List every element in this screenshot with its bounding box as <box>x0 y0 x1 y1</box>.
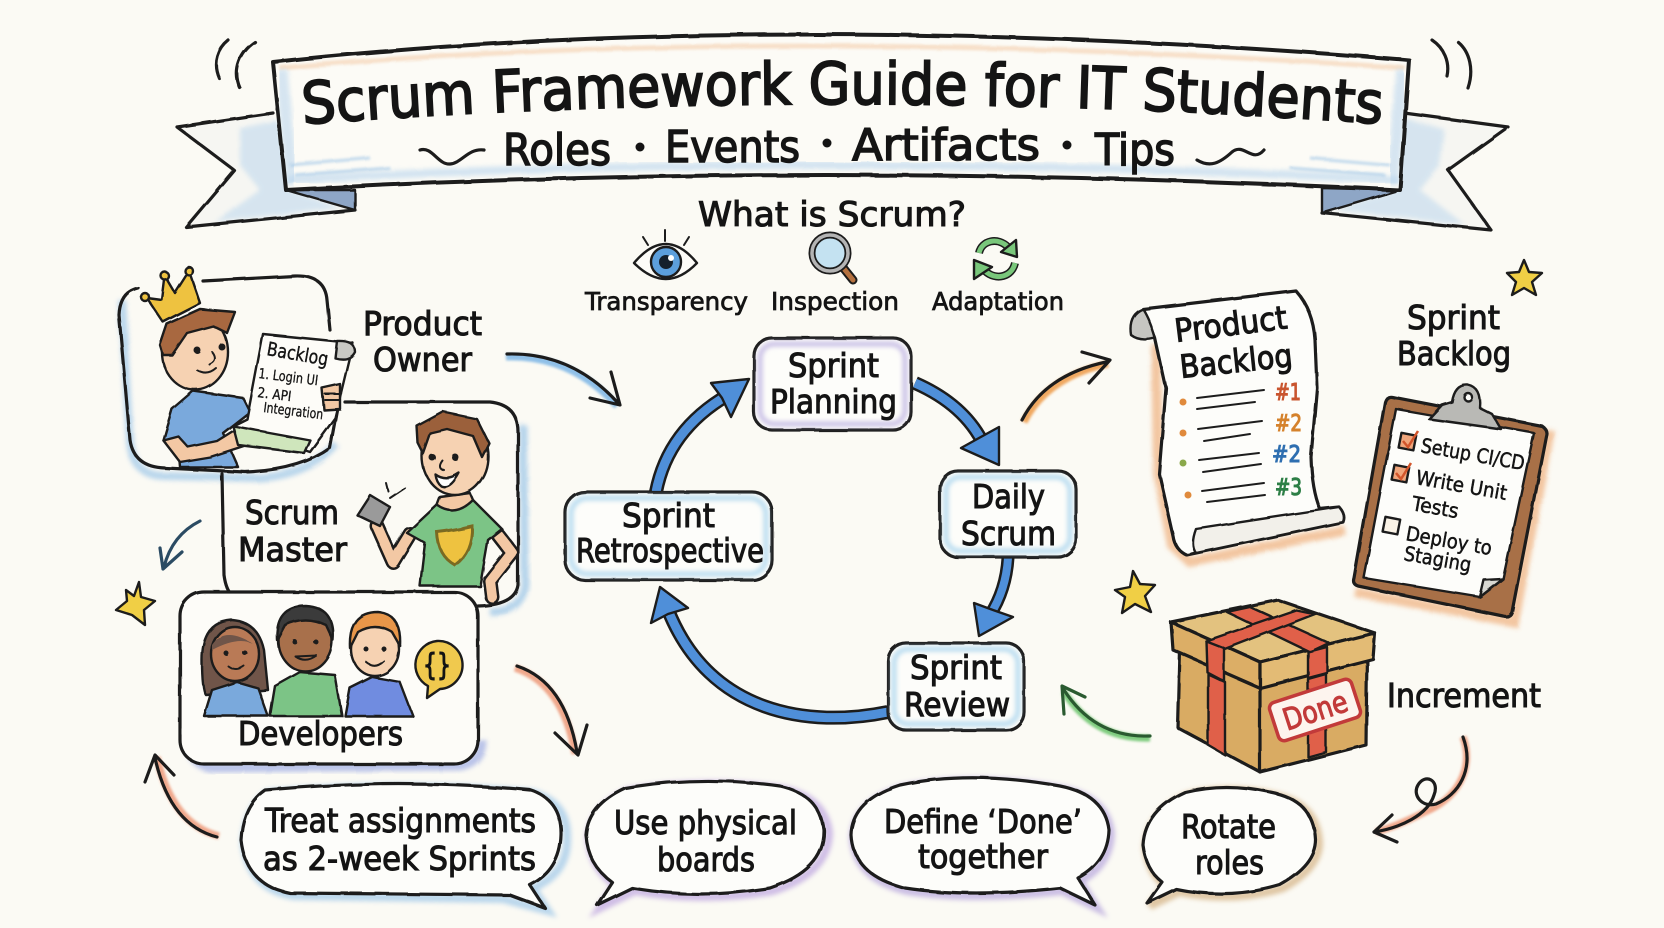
subtitle text: Artifacts <box>852 120 1040 171</box>
tip bubble: treat assignments <box>241 784 567 911</box>
title banner <box>175 32 1510 270</box>
event: daily scrum <box>940 471 1076 557</box>
label: Increment <box>1387 676 1541 715</box>
heading <box>1397 298 1511 373</box>
event: sprint review: Review <box>904 685 1010 724</box>
arm left <box>377 526 410 562</box>
icon: star middle <box>1115 571 1155 613</box>
figure: scrum master <box>357 412 512 597</box>
heading: Backlog <box>1178 336 1294 386</box>
icon: code bubble <box>415 641 463 698</box>
tip bubble: rotate roles <box>1143 787 1319 906</box>
box <box>1171 600 1375 772</box>
arrow: planning to daily <box>915 383 999 465</box>
backlog scroll: 2. API <box>257 385 292 405</box>
arrow: review to retrospective <box>651 587 888 718</box>
shirt <box>407 500 502 586</box>
label <box>238 493 347 569</box>
arm right <box>490 535 512 597</box>
event: sprint review: Sprint <box>910 648 1002 687</box>
figure: developer two <box>270 606 342 716</box>
checklist: Write Unit <box>1414 465 1509 505</box>
checklist: Staging <box>1402 541 1473 577</box>
artifact: product backlog <box>1130 291 1345 562</box>
subtitle text: Events <box>665 122 800 173</box>
arrow: retrospective to planning <box>656 379 749 492</box>
label: Scrum <box>245 493 339 532</box>
arrow: daily to review <box>974 558 1013 636</box>
figure: product owner <box>141 267 253 467</box>
panel: developers <box>180 592 482 768</box>
checklist <box>1383 431 1527 577</box>
label: Inspection <box>771 287 899 316</box>
heading <box>1172 298 1294 386</box>
tip bubble: define done: Define ‘Done’ <box>884 802 1082 841</box>
pillar: inspection <box>771 235 899 316</box>
arrow: developers to tips <box>515 666 587 755</box>
hair <box>417 412 489 457</box>
frame <box>222 402 525 612</box>
arrow: cycle to product backlog <box>1022 352 1110 422</box>
arrow: scrum master to developers <box>160 521 200 569</box>
head <box>422 417 488 495</box>
subtitle swashes <box>420 149 1264 164</box>
face <box>194 346 200 354</box>
shirt <box>163 391 250 467</box>
priority labels <box>1272 380 1302 501</box>
icon: shield <box>437 526 472 565</box>
scroll <box>1130 291 1345 562</box>
banner right tail <box>1322 113 1508 230</box>
pillar: adaptation <box>932 240 1064 316</box>
artifact: increment <box>1171 600 1541 772</box>
gadget <box>357 495 390 526</box>
sprint cycle <box>565 338 1076 730</box>
label: Developers <box>238 714 403 753</box>
event: sprint retrospective <box>565 492 772 580</box>
frame <box>119 276 337 478</box>
checklist: Tests <box>1409 491 1461 523</box>
tip bubble: rotate roles: Rotate <box>1181 807 1276 846</box>
tip bubble: rotate roles: roles <box>1195 843 1264 882</box>
frame <box>180 592 482 768</box>
icon: star left <box>116 582 155 625</box>
icon: crown <box>147 271 200 322</box>
event: sprint planning <box>754 338 911 430</box>
tip bubble: define done: together <box>918 837 1048 876</box>
backlog scroll: 1. Login UI <box>258 366 319 389</box>
priority labels: #1 <box>1275 380 1301 406</box>
tip bubble: physical boards <box>586 781 829 908</box>
icon: eye <box>634 230 697 279</box>
tip bubble: physical boards: Use physical <box>614 803 797 842</box>
event: daily scrum: Daily <box>972 477 1045 516</box>
backlog scroll: Backlog <box>265 338 330 371</box>
priority labels: #2 <box>1272 442 1301 468</box>
motion ticks <box>216 40 1471 88</box>
event: sprint planning: Sprint <box>788 346 879 385</box>
priority labels: #3 <box>1275 475 1302 501</box>
figure: developer three <box>345 612 413 716</box>
checklist: Deploy to <box>1404 521 1494 560</box>
tip bubble: define done <box>851 778 1111 908</box>
banner main ribbon <box>273 34 1409 190</box>
icon: cycle arrows <box>974 240 1017 279</box>
heading: Product <box>1172 298 1289 350</box>
arrow: product owner to cycle <box>506 354 620 406</box>
artifact: sprint backlog <box>1354 298 1550 622</box>
label: Product <box>363 304 482 343</box>
tip bubble: treat assignments: Treat assignments <box>264 801 536 840</box>
arrow: increment loop to tips <box>1374 737 1467 842</box>
icon: magnifier <box>812 235 853 280</box>
arrow: tips to developers <box>145 755 219 837</box>
title text: Scrum Framework Guide for IT Students <box>303 59 1381 125</box>
pillar: transparency <box>584 230 748 316</box>
priority labels: #2 <box>1275 411 1302 437</box>
arrow: increment to review <box>1062 686 1150 738</box>
head <box>162 314 228 390</box>
done label: Done <box>1279 685 1352 738</box>
backlog scroll: Integration <box>263 400 324 423</box>
subtitle text <box>503 120 1175 176</box>
clipboard <box>1354 385 1550 622</box>
heading: Sprint <box>1407 298 1500 337</box>
event: sprint retrospective: Sprint <box>622 496 715 535</box>
arm <box>163 431 253 462</box>
label: Adaptation <box>932 287 1064 316</box>
banner left tail <box>177 113 355 227</box>
subtitle text: Roles <box>503 125 611 176</box>
event: sprint planning: Planning <box>770 382 897 421</box>
list lines <box>1197 390 1265 502</box>
event: daily scrum: Scrum <box>961 514 1056 553</box>
icon: code bubble: {} <box>423 648 451 683</box>
label: Transparency <box>584 287 748 316</box>
heading: what is scrum: What is Scrum? <box>698 195 966 235</box>
hair <box>160 309 235 355</box>
icon: star top right <box>1507 260 1542 295</box>
event: sprint retrospective: Retrospective <box>576 531 764 570</box>
subtitle text: Tips <box>1094 125 1175 176</box>
heading: Backlog <box>1397 334 1511 373</box>
figure: developer one <box>202 620 268 716</box>
panel: product owner <box>119 267 482 478</box>
backlog scroll <box>233 334 355 453</box>
face <box>428 454 436 460</box>
list bullets <box>1180 398 1192 498</box>
event: sprint review <box>888 643 1024 730</box>
label: Master <box>238 530 347 569</box>
tip bubble: physical boards: boards <box>657 840 755 879</box>
panel: scrum master <box>222 402 525 612</box>
checklist: Setup CI/CD <box>1419 433 1527 475</box>
tip bubble: treat assignments: as 2-week Sprints <box>263 839 536 878</box>
label: Owner <box>373 340 472 379</box>
label <box>363 304 482 379</box>
